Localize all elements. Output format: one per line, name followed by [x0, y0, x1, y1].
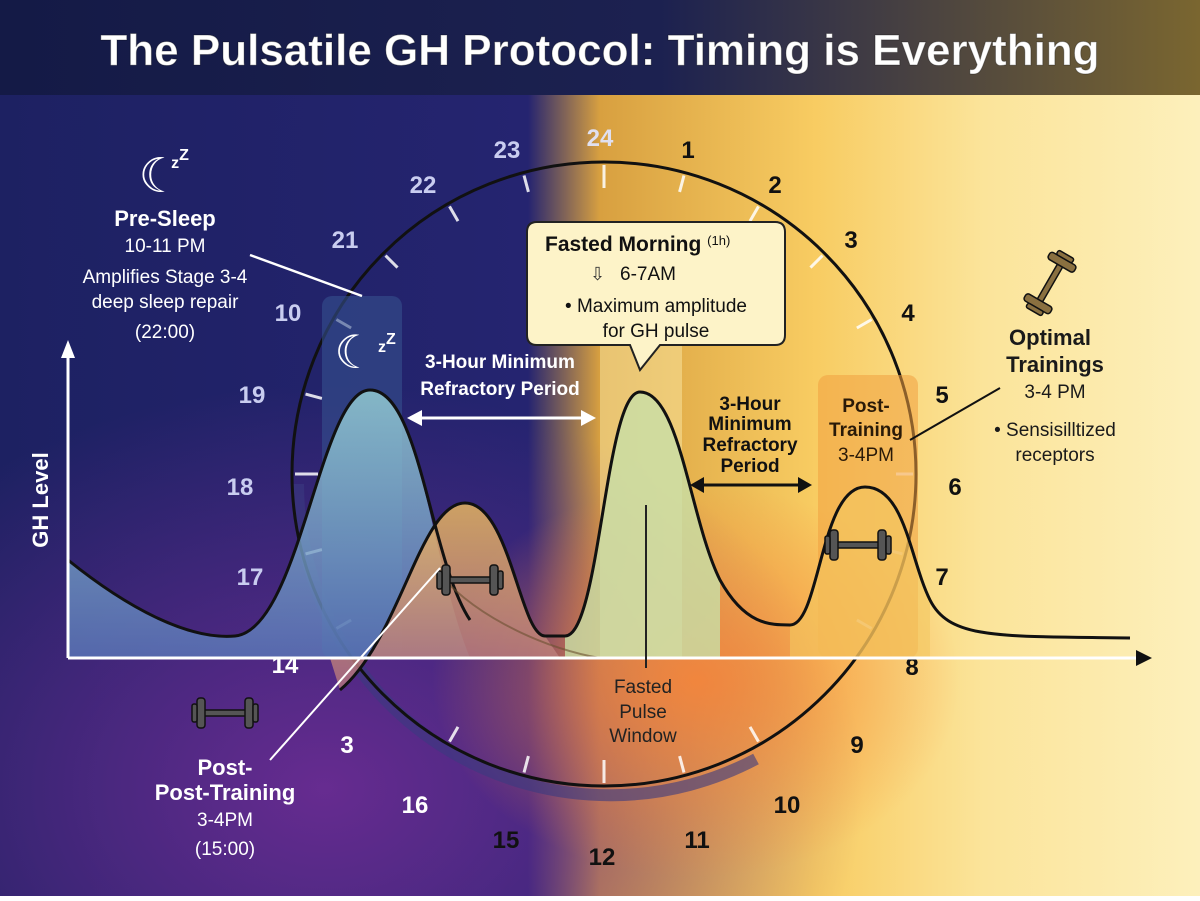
hour numbers: 12 — [589, 844, 615, 871]
title bar: The Pulsatile GH Protocol: Timing is Everything — [100, 26, 1100, 75]
hour numbers: 2 — [768, 172, 782, 199]
pre-sleep label: z — [171, 155, 179, 172]
pre-sleep label: Pre-Sleep — [114, 206, 216, 231]
icon: moon in band: Z — [386, 331, 396, 348]
icon: moon in band — [334, 326, 396, 378]
refractory label left: Refractory Period — [420, 379, 580, 400]
refractory label right — [690, 394, 812, 493]
callout: fasted morning: (1h) — [707, 233, 730, 248]
post-post-training label: 3-4PM — [197, 810, 253, 831]
GH curve line — [68, 390, 1130, 690]
pre-sleep label: Amplifies Stage 3-4 — [83, 267, 248, 288]
hour numbers: 16 — [402, 792, 428, 819]
callout: fasted morning: Fasted Morning — [545, 233, 701, 256]
refractory label left: 3-Hour Minimum — [425, 352, 575, 373]
hour numbers: 10 — [275, 300, 301, 327]
hour numbers: 9 — [850, 732, 864, 759]
post-post-training label: (15:00) — [195, 839, 255, 860]
refractory label right: Refractory — [702, 435, 798, 456]
hour numbers: 21 — [332, 227, 358, 254]
hour numbers: 11 — [684, 827, 710, 854]
pre-sleep label — [83, 147, 362, 343]
hour numbers: 17 — [237, 564, 263, 591]
optimal trainings label — [910, 325, 1116, 466]
hour numbers: 10 — [774, 792, 800, 819]
hour numbers: 3 — [340, 732, 354, 759]
pre-sleep label: ☾ — [138, 150, 182, 203]
refractory label right: Period — [720, 456, 780, 477]
title bar — [0, 0, 1200, 95]
pre-sleep label: deep sleep repair — [92, 292, 239, 313]
icon: moon in band: ☾ — [334, 326, 376, 378]
hour numbers: 19 — [239, 382, 265, 409]
fasted pulse window: Window — [609, 726, 677, 747]
fasted pulse window — [609, 505, 677, 747]
pre-sleep label: (22:00) — [135, 322, 195, 343]
callout: fasted morning: • Maximum amplitude — [565, 296, 747, 317]
callout: fasted morning — [527, 222, 785, 370]
refractory label right: Minimum — [708, 414, 792, 435]
post-training band label: Training — [829, 420, 903, 441]
GH curve fills — [68, 390, 930, 690]
post-training band label: Post- — [842, 396, 890, 417]
axes — [28, 340, 1152, 666]
optimal trainings label: 3-4 PM — [1024, 382, 1086, 403]
hour numbers — [227, 125, 962, 871]
refractory label left — [407, 352, 596, 426]
fasted pulse window: Fasted — [614, 677, 672, 698]
hour numbers: 18 — [227, 474, 253, 501]
dumbbells — [192, 247, 1079, 728]
pre-sleep label: Z — [179, 147, 189, 164]
callout: fasted morning: for GH pulse — [603, 321, 709, 342]
hour numbers: 15 — [493, 827, 519, 854]
hour numbers: 14 — [272, 652, 299, 679]
post-post-training label — [155, 568, 440, 860]
optimal trainings label: Trainings — [1006, 352, 1104, 377]
hour numbers: 23 — [494, 137, 520, 164]
hour numbers: 4 — [901, 300, 915, 327]
post-post-training label: Post- — [198, 755, 252, 780]
post-training band label: 3-4PM — [838, 445, 894, 466]
callout: fasted morning: ⇩ — [590, 264, 605, 284]
callout: fasted morning: 6-7AM — [620, 264, 676, 285]
hour numbers: 6 — [948, 474, 962, 501]
hour numbers: 24 — [587, 125, 614, 152]
pre-sleep label: 10-11 PM — [125, 236, 205, 257]
clock face — [292, 162, 916, 795]
hour numbers: 5 — [935, 382, 949, 409]
highlight bands — [322, 296, 918, 658]
refractory label right: 3-Hour — [719, 394, 781, 415]
icon: moon in band: z — [378, 339, 386, 356]
hour numbers: 8 — [905, 654, 919, 681]
post-post-training label: Post-Training — [155, 780, 295, 805]
optimal trainings label: receptors — [1015, 445, 1095, 466]
post-training band label — [829, 396, 903, 466]
optimal trainings label: • Sensisilltized — [994, 420, 1116, 441]
fasted pulse window: Pulse — [619, 702, 667, 723]
optimal trainings label: Optimal — [1009, 325, 1091, 350]
hour numbers: 22 — [410, 172, 436, 199]
hour numbers: 1 — [681, 137, 695, 164]
hour numbers: 7 — [935, 564, 949, 591]
hour numbers: 3 — [844, 227, 858, 254]
axes: GH Level — [28, 452, 53, 548]
